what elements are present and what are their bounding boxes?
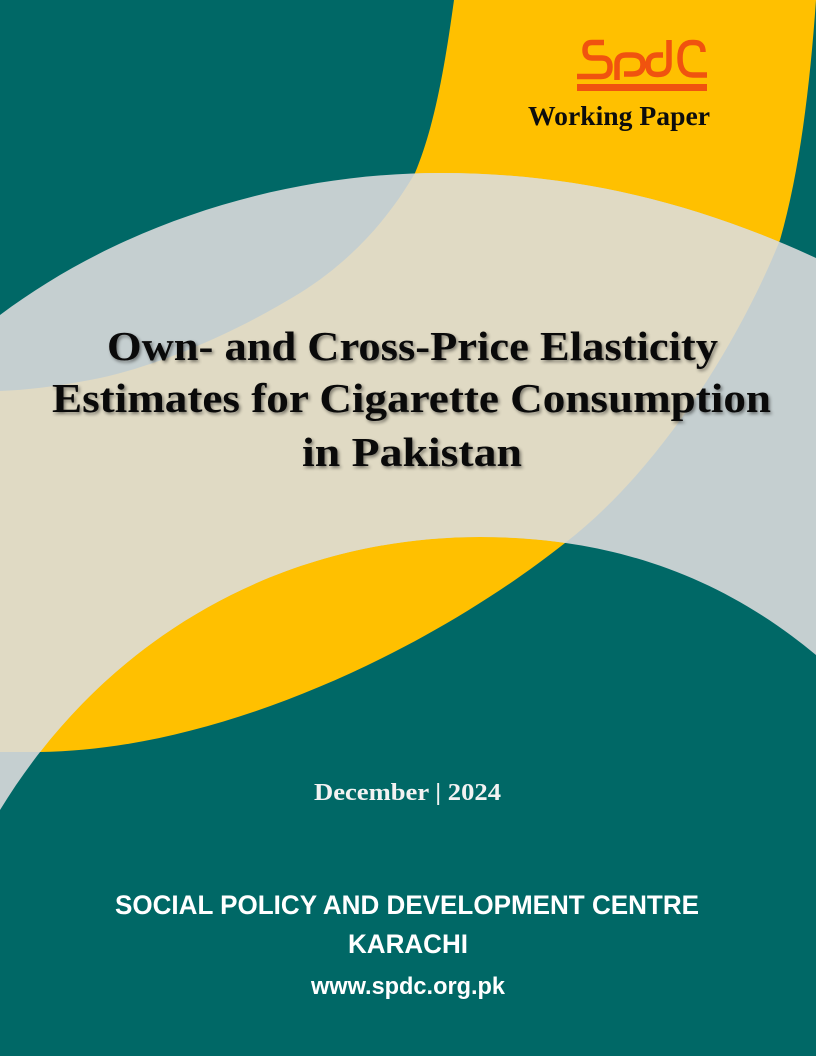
organisation name [115,890,699,959]
icon: SPDC logo [577,40,707,91]
label: Working Paper: Working Paper [528,101,710,131]
website: www.spdc.org.pk [310,973,506,1000]
title: Estimates for Cigarette Consumption [52,375,771,421]
organisation name: SOCIAL POLICY AND DEVELOPMENT CENTRE [115,890,699,920]
title: in Pakistan [302,429,522,475]
date: December | 2024 [314,780,501,806]
organisation name: KARACHI [348,929,468,959]
yellow crescent shape [0,0,816,752]
beige overlap of band and crescent [0,173,780,752]
title [52,323,771,475]
title: Own- and Cross-Price Elasticity [107,323,719,369]
pale grey band [0,173,816,810]
